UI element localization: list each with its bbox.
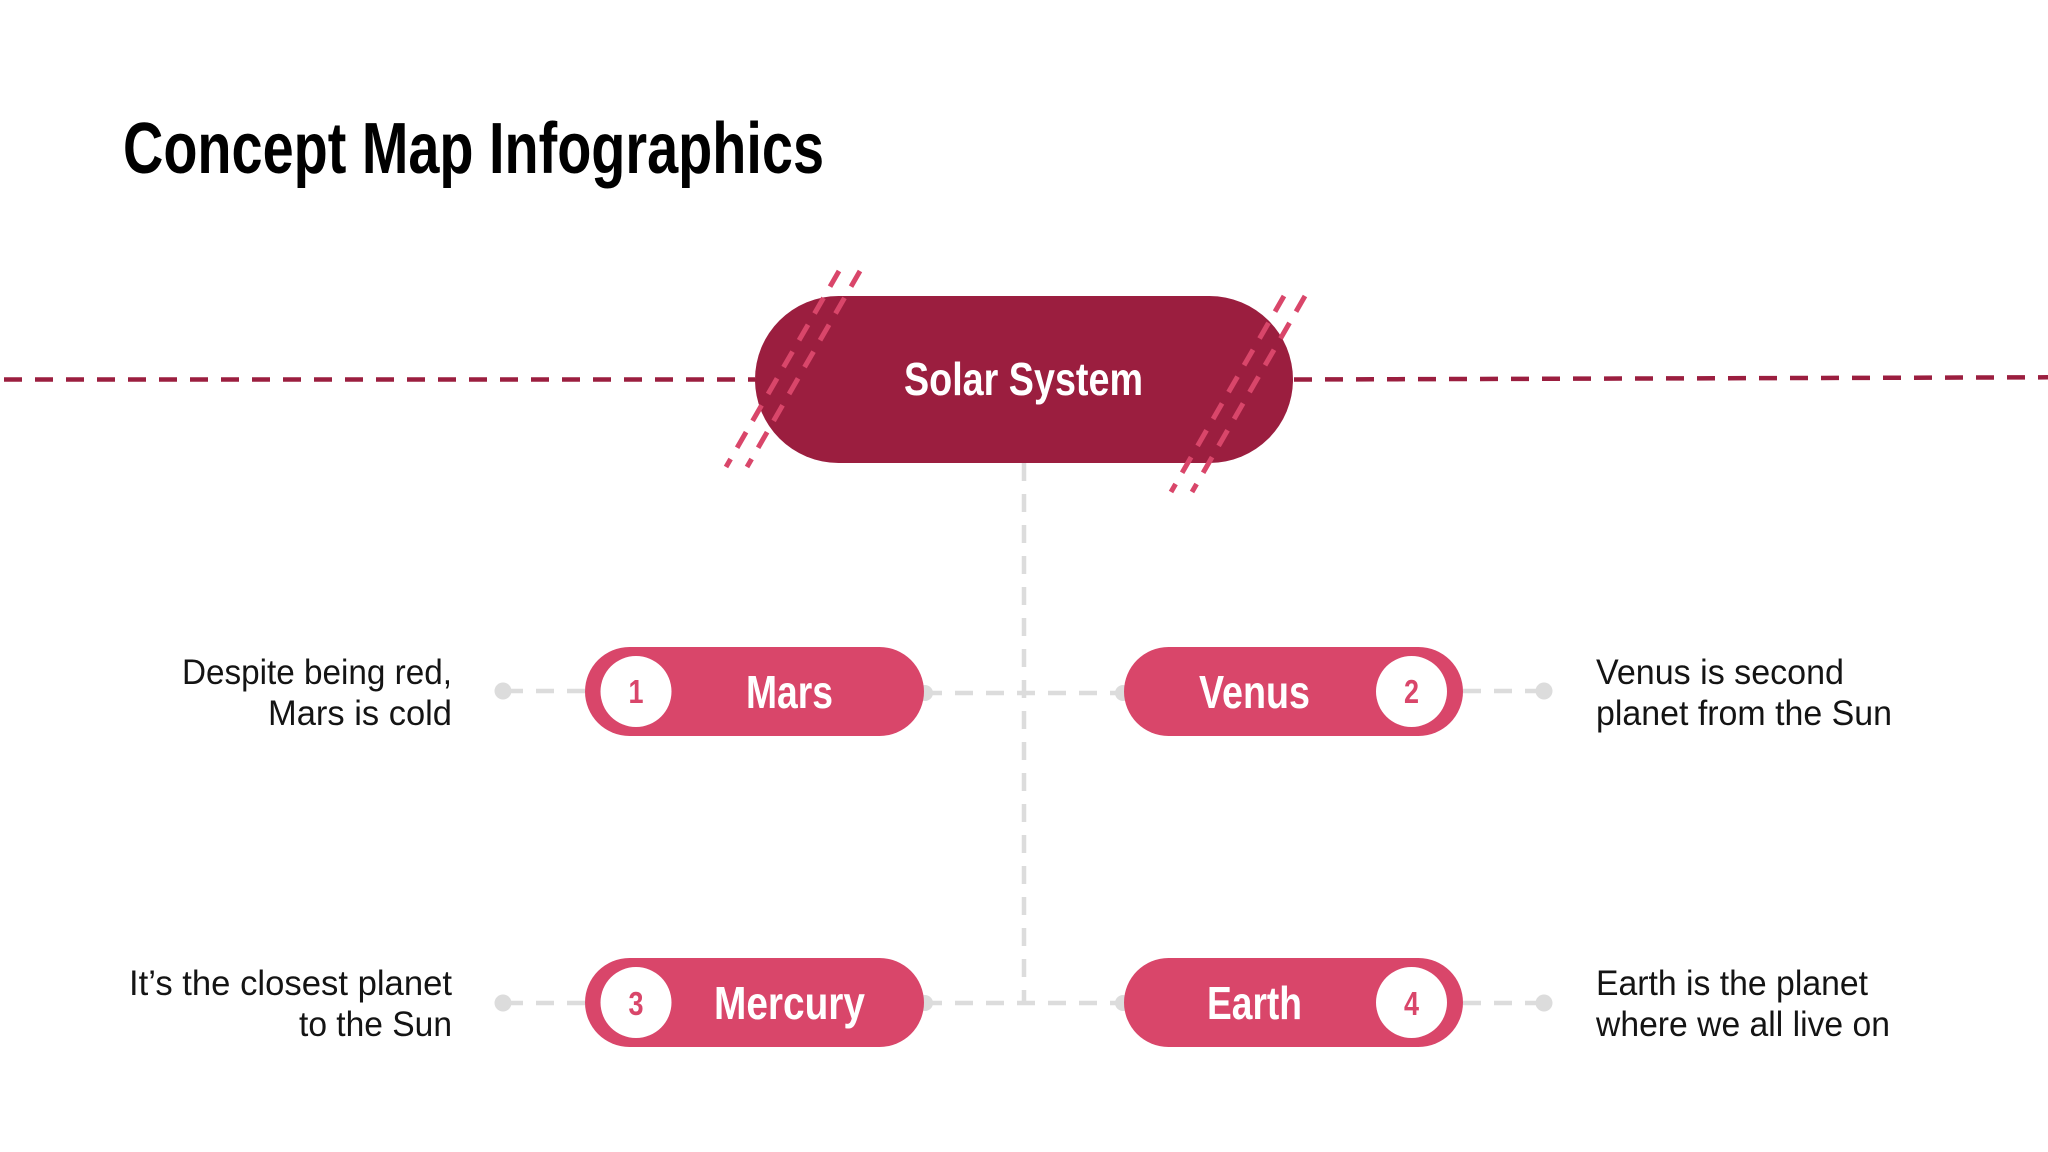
grey connector lines xyxy=(494,463,1552,1012)
text: Venus description: Venus is second xyxy=(1596,653,1844,692)
title: Concept Map Infographics xyxy=(123,109,824,189)
red dashed axis line xyxy=(4,377,2048,380)
node: Mercury xyxy=(585,958,924,1047)
text: Venus description xyxy=(1596,653,1892,733)
text: Earth description xyxy=(1595,964,1890,1044)
node: Mercury: Mercury xyxy=(714,977,865,1029)
node: Earth: Earth xyxy=(1207,977,1302,1029)
text: Earth description: Earth is the planet xyxy=(1596,964,1868,1003)
node: Mars: 1 xyxy=(628,673,644,710)
text: Mercury description: to the Sun xyxy=(299,1005,452,1044)
node: Earth xyxy=(1124,958,1463,1047)
text: Mercury description xyxy=(129,964,452,1044)
diagonal dashes left xyxy=(726,271,860,467)
node: Venus: Venus xyxy=(1199,666,1310,718)
central node: Solar System: Solar System xyxy=(904,353,1143,405)
text: Mars description: Mars is cold xyxy=(268,694,452,733)
node: Mars xyxy=(585,647,924,736)
text: Mars description xyxy=(182,653,452,733)
node: Venus: 2 xyxy=(1404,673,1419,710)
text: Venus description: planet from the Sun xyxy=(1596,694,1892,733)
node: Venus xyxy=(1124,647,1463,736)
node: Earth: 4 xyxy=(1404,985,1420,1022)
node: Mars: Mars xyxy=(746,666,833,718)
text: Mars description: Despite being red, xyxy=(182,653,452,692)
central node: Solar System xyxy=(755,296,1293,463)
node: Mercury: 3 xyxy=(628,985,644,1022)
text: Mercury description: It’s the closest planet xyxy=(129,964,452,1003)
diagonal dashes right xyxy=(1171,296,1305,492)
text: Earth description: where we all live on xyxy=(1595,1005,1890,1044)
